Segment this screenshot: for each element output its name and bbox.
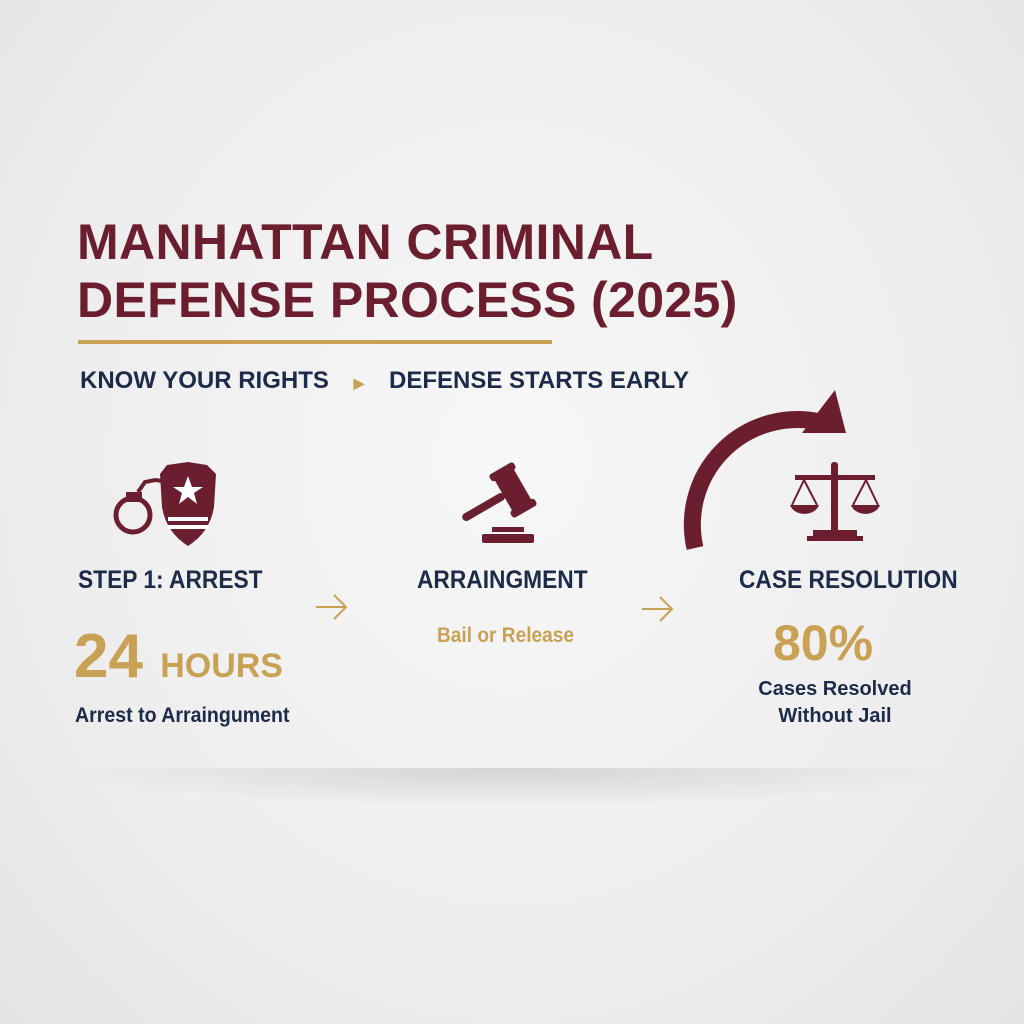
step 1 stat: 24 HOURS [74,622,283,691]
arrow 1 [316,594,348,620]
step 2 caption: Bail or Release [437,624,574,647]
subtitle: KNOW YOUR RIGHTS ▶ DEFENSE STARTS EARLY [80,367,689,394]
step 2 heading: ARRAINGMENT [417,566,588,594]
title: MANHATTAN CRIMINAL [77,214,654,270]
gold underline [78,340,552,344]
shadow band [60,768,960,808]
icon: scales [790,462,880,541]
step 1 heading: STEP 1: ARREST [78,566,263,594]
step 3 caption: Cases Resolved Without Jail [758,678,912,727]
icon: circular arrow [684,390,846,550]
title: DEFENSE PROCESS (2025) [77,272,738,328]
arrow 2 [642,596,674,622]
title [77,214,738,328]
step 3 stat: 80% [773,615,873,671]
icon: handcuffs and badge [114,462,216,546]
icon: gavel [462,462,536,543]
step 3 heading: CASE RESOLUTION [739,566,958,594]
step 1 caption: Arrest to Arraingument [75,703,290,727]
